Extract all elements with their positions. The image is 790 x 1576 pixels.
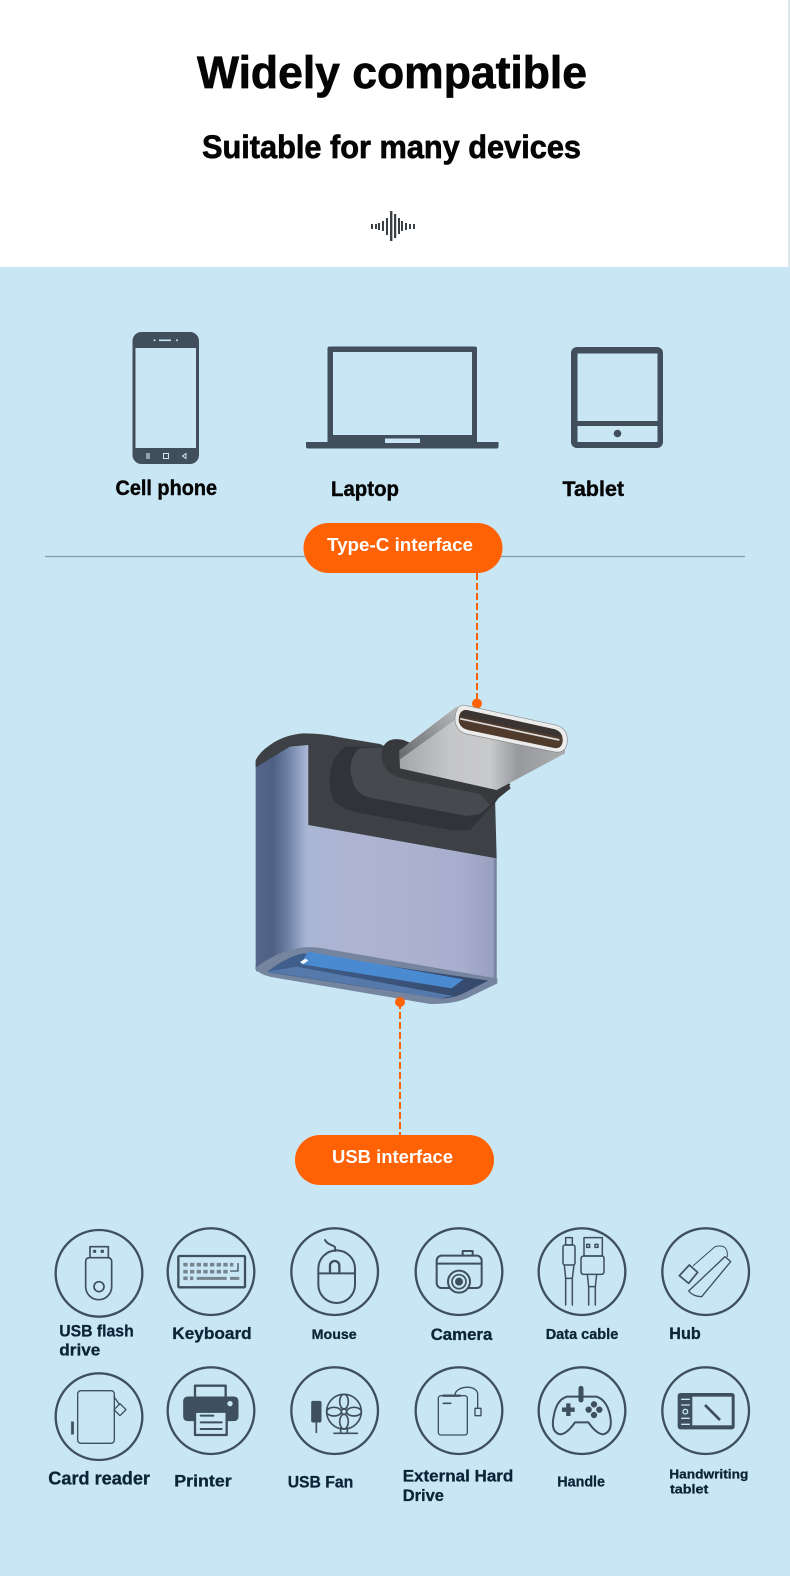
label: external hard drive: Drive — [403, 1486, 444, 1505]
label: handwriting tablet: Handwriting — [669, 1466, 748, 1481]
callout: Type-C interface: Type-C interface — [327, 535, 473, 555]
arrow: USB leader line — [395, 997, 405, 1135]
icon: data cable — [539, 1228, 625, 1315]
arrow: Type-C leader line — [472, 573, 482, 708]
label: tablet: Tablet — [562, 478, 624, 501]
label: hub: Hub — [669, 1324, 701, 1343]
icon: handwriting tablet — [662, 1367, 749, 1454]
icon: external hard drive — [416, 1367, 502, 1454]
label: external hard drive: External Hard — [403, 1467, 513, 1486]
icon grid: left half — [56, 1228, 378, 1460]
label: USB flash drive — [59, 1322, 134, 1360]
USB port rim — [255, 947, 497, 1004]
rubber boot — [330, 747, 507, 831]
device labels — [48, 1322, 748, 1505]
label: handwriting tablet — [669, 1466, 748, 1496]
label: printer: Printer — [174, 1472, 232, 1491]
callout: USB interface — [295, 1135, 494, 1185]
label: data cable: Data cable — [546, 1327, 618, 1343]
product: USB to Type-C angled adapter — [255, 705, 567, 1004]
USB blue tongue — [300, 952, 463, 988]
label: handle: Handle — [557, 1474, 605, 1491]
icon: cell phone — [132, 332, 199, 464]
adapter housing side — [255, 743, 327, 972]
icon: sound wave — [371, 211, 415, 241]
icon: USB flash drive — [56, 1230, 142, 1317]
icon: game handle — [539, 1367, 625, 1454]
divider line — [45, 556, 745, 558]
icon: card reader — [56, 1373, 142, 1460]
header panel — [0, 0, 790, 267]
icon: mouse — [291, 1228, 378, 1315]
label: camera: Camera — [431, 1325, 493, 1344]
label: keyboard: Keyboard — [172, 1324, 252, 1343]
adapter dark shoulder — [256, 733, 497, 858]
Type-C port opening — [455, 705, 567, 752]
label: handwriting tablet: tablet — [670, 1481, 709, 1496]
icon: keyboard — [168, 1228, 254, 1315]
icon grid: right half — [416, 1228, 749, 1454]
label: USB fan: USB Fan — [288, 1473, 353, 1492]
icon: tablet — [571, 347, 663, 448]
Type-C plug metal — [399, 707, 565, 790]
USB port cavity — [267, 953, 488, 998]
label: USB flash drive: USB flash — [59, 1322, 134, 1341]
label: laptop: Laptop — [331, 478, 399, 501]
icon: hub — [662, 1228, 749, 1315]
label: cell phone: Cell phone — [116, 477, 217, 500]
icon: laptop — [306, 346, 498, 448]
callout: USB interface: USB interface — [332, 1147, 453, 1167]
icon: camera — [416, 1228, 502, 1315]
adapter housing front — [308, 825, 497, 983]
icon: printer — [168, 1367, 254, 1454]
title: Widely compatible — [197, 47, 587, 98]
callout: Type-C interface — [304, 523, 502, 573]
label: card reader: Card reader — [48, 1468, 150, 1488]
device row: cell phone, laptop, tablet — [116, 332, 663, 501]
subtitle: Suitable for many devices — [202, 129, 581, 165]
label: USB flash drive: drive — [59, 1341, 100, 1360]
label: external hard drive — [403, 1467, 513, 1505]
label: mouse: Mouse — [312, 1326, 357, 1342]
icon: USB fan — [291, 1367, 378, 1454]
